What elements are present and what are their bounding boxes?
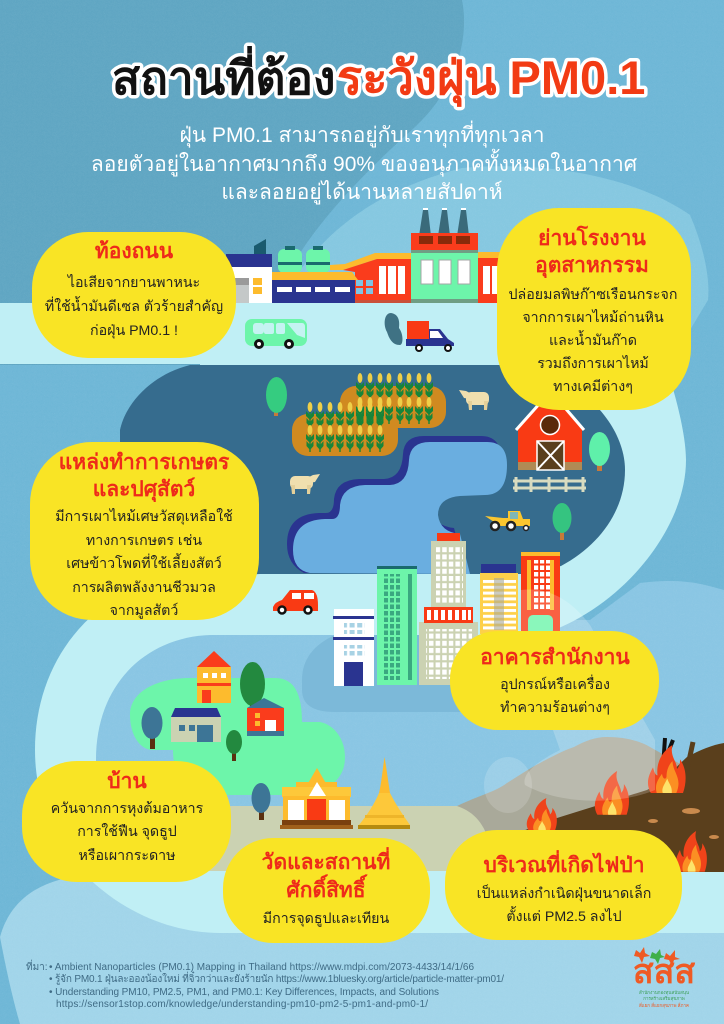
callout: temples [223,838,430,943]
subtitle [91,120,638,205]
callout: home: หรือเผากระดาษ [78,847,176,864]
callout: temples: วัดและสถานที่ [262,846,390,874]
cows [290,390,489,494]
callout: offices [450,631,659,730]
sources: https://sensor1stop.com/knowledge/understanding-pm10-pm2-5-pm1-and-pm0-1/ [56,999,428,1010]
callout: industrial district: จากการเผาไหม้ถ่านหิน [522,309,664,326]
callout: industrial district: อุตสาหกรรม [535,254,649,279]
lower land [130,635,500,871]
callout: industrial district [497,208,691,410]
delivery truck with smoke [385,313,454,351]
logo: การสร้างเสริมสุขภาพ [643,996,685,1002]
title [112,46,645,107]
sources: • รู้จัก PM0.1 ฝุ่นละอองน้องใหม่ ที่จิ๋วกว่าและยังร้ายนัก https://www.1bluesky.org/article/particle-matter-pm01/ [49,971,504,985]
road band [0,303,724,933]
sources: • Ambient Nanoparticles (PM0.1) Mapping in Thailand https://www.mdpi.com/2073-4433/14/1/66 [49,962,474,973]
callout: farms: ทางการเกษตร เช่น [86,533,202,549]
callout: farms: แหล่งทำการเกษตร [59,451,230,474]
subtitle: และลอยอยู่ได้นานหลายสัปดาห์ [221,180,503,205]
title: ระวังฝุ่น PM0.1 [337,51,645,107]
callout: farms: เศษข้าวโพดที่ใช้เลี้ยงสัตว์ [66,553,222,572]
logo: สี่แยก สี่แยกสุขภาพ สี่ภาค [639,1002,689,1009]
callout: industrial district: ปล่อยมลพิษก๊าซเรือนกระจก [509,286,677,303]
crop fields [292,373,446,456]
callout: home: การใช้ฟืน จุดธูป [77,823,177,840]
callout: offices: ทำความร้อนต่างๆ [500,700,610,716]
stupa [358,757,410,829]
logo [633,947,695,1009]
callout: roads: ไอเสียจากยานพาหนะ [67,274,200,291]
callout: industrial district: ทางเคมีต่างๆ [553,379,633,395]
callout: home: ควันจากการหุงต้มอาหาร [51,801,204,817]
trees on farm [266,377,610,540]
callout: industrial district: รวมถึงการเผาไหม้ [537,355,649,372]
subtitle: ลอยตัวอยู่ในอากาศมากถึง 90% ของอนุภาคทั้งหมดในอากาศ [91,149,638,177]
callout: forest fire: ตั้งแต่ PM2.5 ลงไป [506,906,622,925]
title: สถานที่ต้อง [112,46,336,104]
logo: สำนักงานกองทุนสนับสนุน [639,989,689,996]
callout: offices: อุปกรณ์หรือเครื่อง [500,674,610,693]
temple [280,768,353,829]
haze clouds [484,589,655,813]
callout: farms: จากมูลสัตว์ [110,602,178,619]
callout: home [22,761,231,882]
flames [527,745,707,872]
dark ground with river [120,365,625,574]
callout: farms: และปศุสัตว์ [93,477,195,503]
callout: forest fire [445,830,682,940]
callout: roads: ก่อฝุ่น PM0.1 ! [90,323,178,339]
bus [245,319,307,348]
office buildings [333,533,560,686]
callout: roads: ท้องถนน [95,239,174,263]
mountains [457,737,724,872]
tractor [485,511,530,530]
barn [513,402,586,492]
callout: farms: มีการเผาไหม้เศษวัสดุเหลือใช้ [55,508,233,525]
callout: industrial district: และน้ำมันก๊าด [549,330,637,349]
callout: temples: ศักดิ์สิทธิ์ [286,874,368,902]
callout: farms [30,442,259,620]
sources: ที่มา: [26,959,48,973]
sources [26,959,504,1010]
callout: farms: การผลิตพลังงานชีวมวล [72,580,216,596]
callout: temples: มีการจุดธูปและเทียน [263,911,389,927]
callout: offices: อาคารสำนักงาน [480,646,630,669]
red car [273,590,318,614]
callout: industrial district: ย่านโรงงาน [538,225,646,250]
factory row [226,208,500,303]
callout: forest fire: เป็นแหล่งกำเนิดฝุ่นขนาดเล็ก [477,883,651,902]
callout: roads [32,232,236,358]
logo: สสส [633,953,695,991]
callout: roads: ที่ใช้น้ำมันดีเซล ตัวร้ายสำคัญ [45,296,223,315]
callout: forest fire: บริเวณที่เกิดไฟป่า [484,849,644,877]
callout: home: บ้าน [107,769,147,793]
sources: • Understanding PM10, PM2.5, PM1, and PM0.1: Key Differences, Impacts, and Solutions [49,987,439,998]
subtitle: ฝุ่น PM0.1 สามารถอยู่กับเราทุกที่ทุกเวลา [179,120,545,148]
houses and trees [142,651,284,820]
